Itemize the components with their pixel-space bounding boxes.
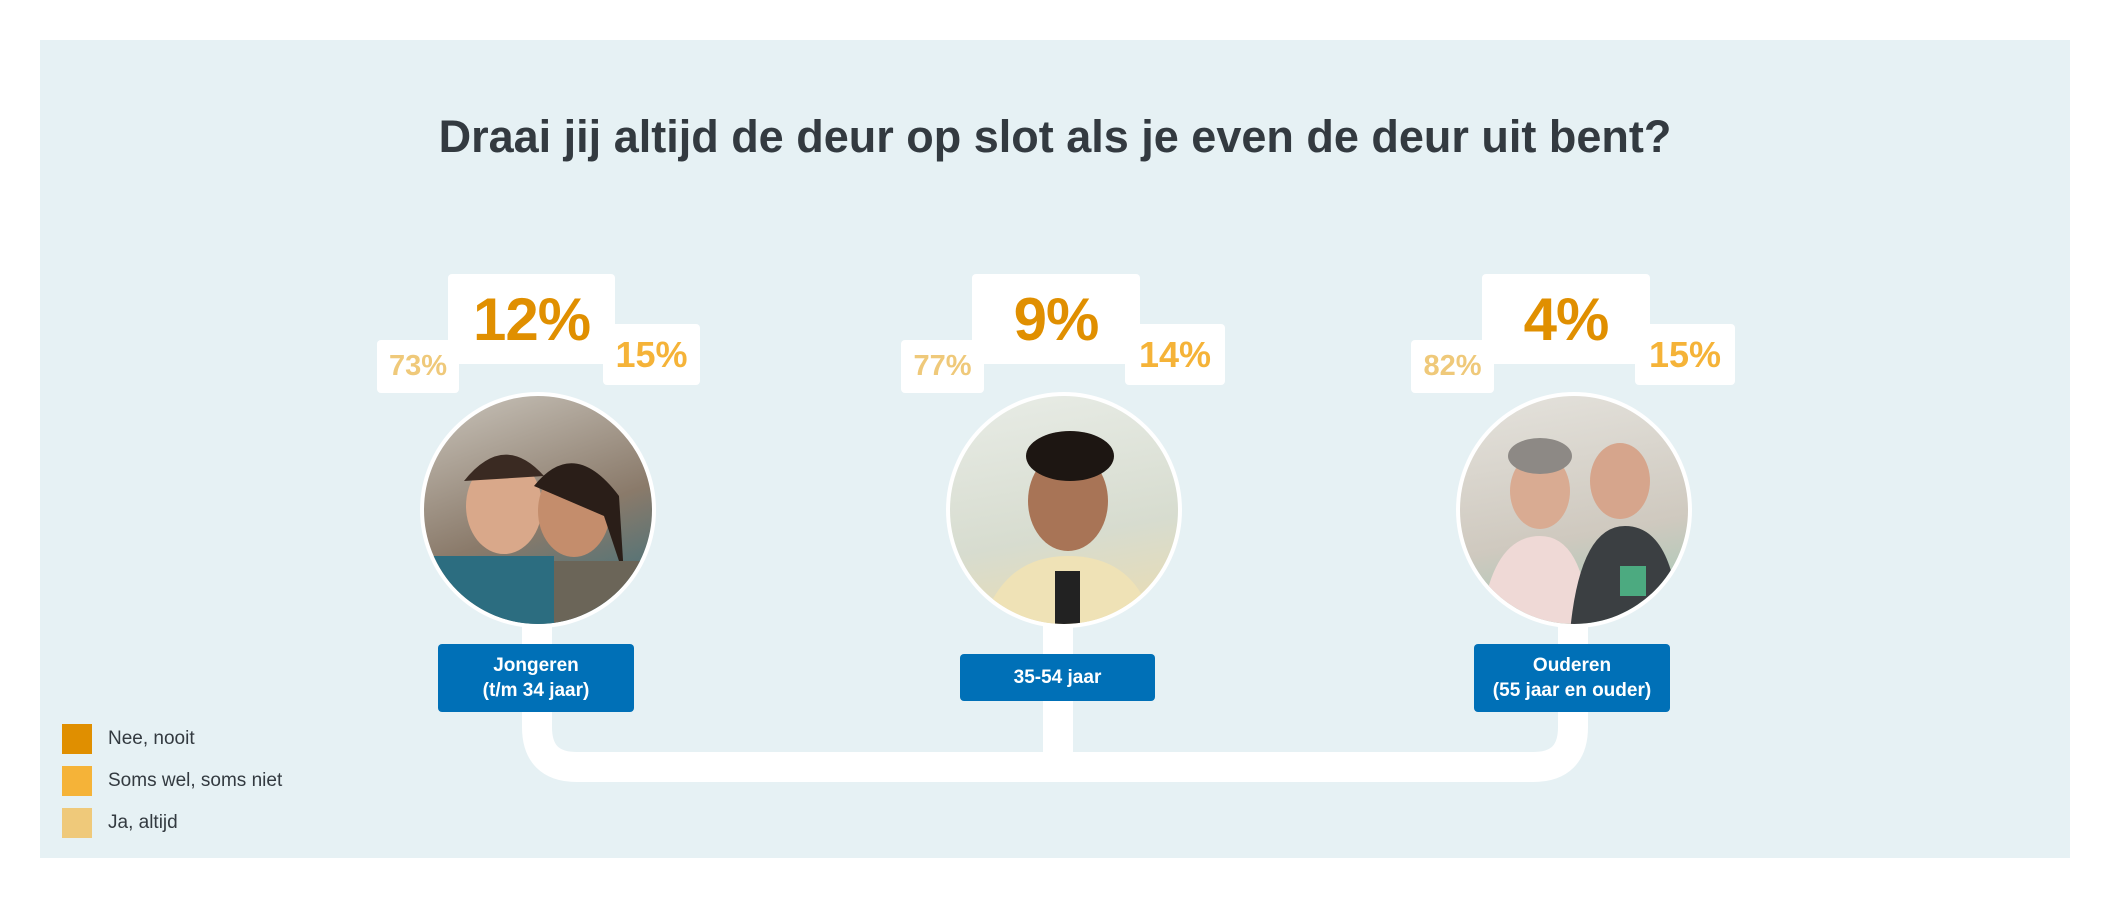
legend item: soms: Soms wel, soms niet xyxy=(108,770,282,791)
percent: 9% xyxy=(972,274,1140,364)
label: ouderen: Ouderen xyxy=(1533,655,1611,676)
percent: 15% xyxy=(603,324,700,385)
label: ouderen xyxy=(1474,644,1670,712)
label: 35-54 jaar: 35-54 jaar xyxy=(1014,667,1101,688)
label: 35-54 jaar xyxy=(960,654,1155,701)
group: jongeren xyxy=(377,274,700,712)
percent: 4% xyxy=(1482,274,1650,364)
percent: 73%: 73% xyxy=(389,350,447,382)
photo: young couple xyxy=(420,392,656,628)
legend item: nee, nooit xyxy=(62,724,195,754)
legend item: soms xyxy=(62,766,282,796)
label: jongeren: Jongeren xyxy=(493,655,579,676)
label: jongeren: (t/m 34 jaar) xyxy=(483,680,589,701)
legend xyxy=(62,724,282,838)
percent: 12%: 12% xyxy=(473,286,590,352)
percent: 15% xyxy=(1635,324,1735,385)
group: ouderen xyxy=(1411,274,1735,712)
percent: 77%: 77% xyxy=(913,350,972,382)
group: 35-54 jaar xyxy=(901,274,1225,701)
photo: man xyxy=(946,392,1182,628)
percent: 9%: 9% xyxy=(1014,286,1098,352)
percent: 82%: 82% xyxy=(1423,350,1482,382)
label: ouderen: (55 jaar en ouder) xyxy=(1493,680,1651,701)
photo: older couple xyxy=(1456,392,1692,628)
percent: 82% xyxy=(1411,340,1494,393)
percent: 15%: 15% xyxy=(1649,334,1721,374)
title: Draai jij altijd de deur op slot als je even de deur uit bent? xyxy=(439,111,1671,162)
percent: 12% xyxy=(448,274,615,364)
percent: 14% xyxy=(1125,324,1225,385)
percent: 15%: 15% xyxy=(615,334,688,374)
legend item: ja, altijd: Ja, altijd xyxy=(108,812,178,833)
percent: 73% xyxy=(377,340,459,393)
percent: 14%: 14% xyxy=(1139,334,1211,374)
percent: 4%: 4% xyxy=(1524,286,1608,352)
percent: 77% xyxy=(901,340,984,393)
legend item: nee, nooit: Nee, nooit xyxy=(108,728,195,749)
label: jongeren xyxy=(438,644,634,712)
legend item: ja, altijd xyxy=(62,808,178,838)
